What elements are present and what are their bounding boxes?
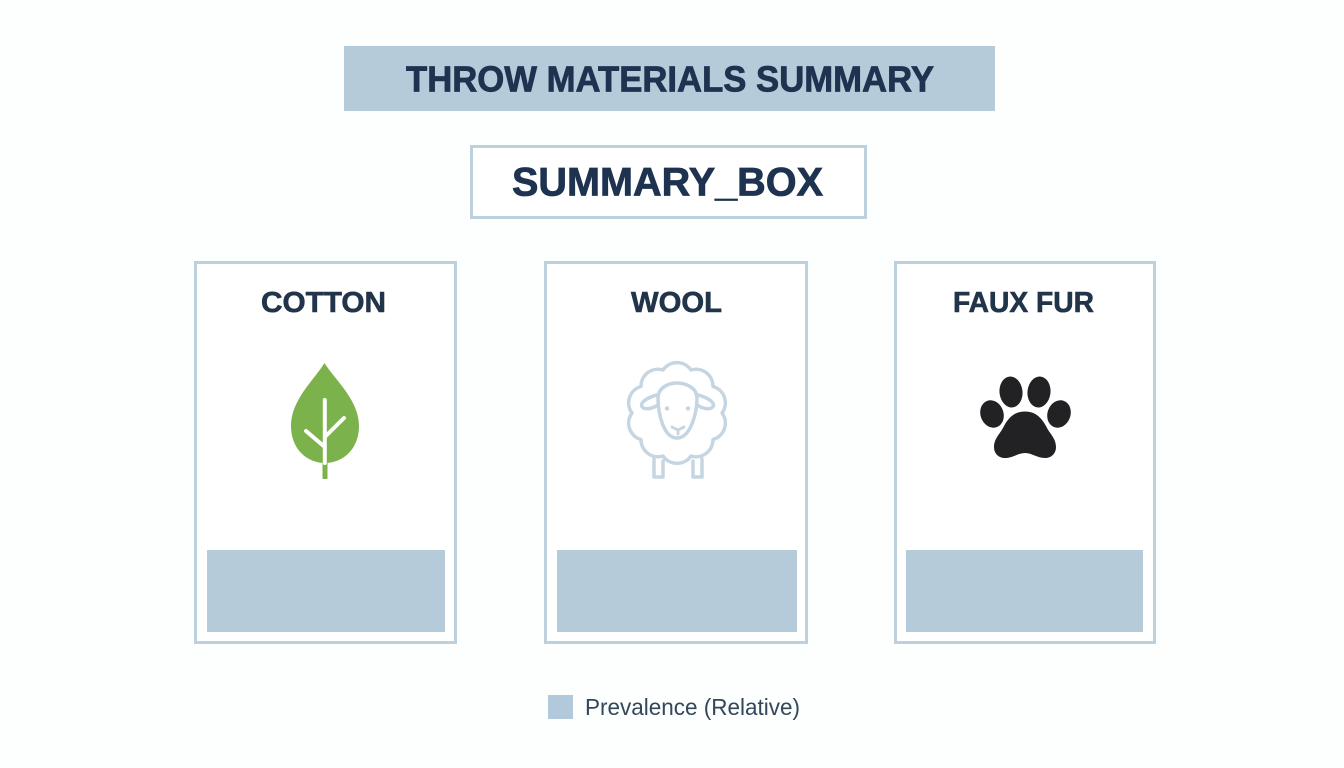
wool heading: WOOL	[631, 287, 722, 319]
panel: faux fur	[896, 262, 1154, 642]
cotton heading: COTTON	[261, 287, 386, 319]
faux fur heading: FAUX FUR	[953, 287, 1094, 319]
legend label: Prevalence (Relative)	[585, 694, 800, 720]
title banner	[344, 46, 995, 111]
panel: cotton	[196, 262, 456, 642]
icon: paw	[976, 375, 1075, 458]
title text: THROW MATERIALS SUMMARY	[406, 58, 934, 100]
cotton prevalence bar	[207, 550, 445, 632]
icon: sheep	[629, 363, 725, 477]
wool prevalence bar	[557, 550, 797, 632]
legend swatch	[548, 695, 573, 719]
icon: leaf	[291, 363, 359, 479]
summary box	[472, 146, 866, 218]
legend	[548, 694, 800, 720]
faux fur prevalence bar	[906, 550, 1143, 632]
panel: wool	[546, 262, 806, 642]
summary box label: SUMMARY_BOX	[512, 160, 823, 204]
